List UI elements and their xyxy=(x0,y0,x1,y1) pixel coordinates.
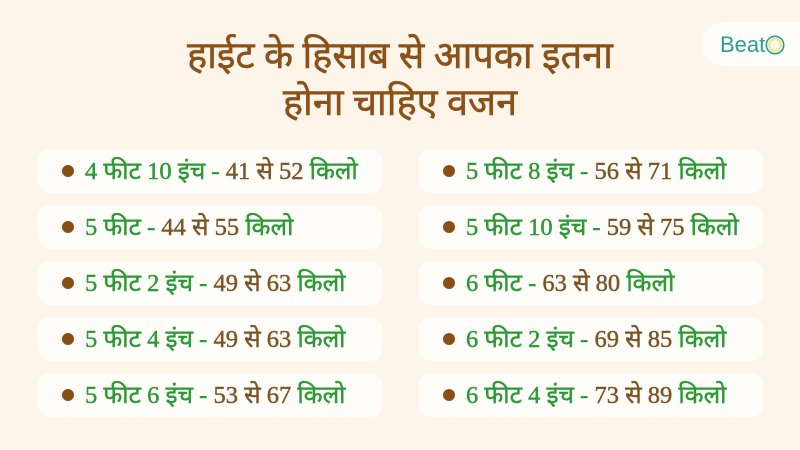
row: 5 feet 4 inches xyxy=(38,317,382,361)
logo: BeatO xyxy=(702,22,800,66)
row: 5 feet 6 inches: 5 फीट 6 इंच - 53 से 67 किलो xyxy=(85,382,346,409)
row: 5 feet 8 inches: 5 फीट 8 इंच - 56 से 71 किलो xyxy=(466,158,727,185)
row: 5 feet 4 inches: 5 फीट 4 इंच - 49 से 63 किलो xyxy=(85,326,346,353)
row: 5 feet 2 inches: 5 फीट 2 इंच - 49 से 63 किलो xyxy=(85,270,346,297)
row: 6 feet xyxy=(419,261,763,305)
title line 2: होना चाहिए वजन xyxy=(283,82,517,124)
row: 5 feet 8 inches xyxy=(419,149,763,193)
row: 6 feet 4 inches xyxy=(419,373,763,417)
row: 4 feet 10 inches: 4 फीट 10 इंच - 41 से 52 किलो xyxy=(85,158,358,185)
row: 6 feet 2 inches xyxy=(419,317,763,361)
row: 6 feet: 6 फीट - 63 से 80 किलो xyxy=(466,270,674,297)
row: 5 feet 10 inches: 5 फीट 10 इंच - 59 से 75 किलो xyxy=(466,214,739,241)
logo: BeatO: Beat xyxy=(720,32,765,57)
row: 5 feet 2 inches xyxy=(38,261,382,305)
row: 6 feet 4 inches: 6 फीट 4 इंच - 73 से 89 किलो xyxy=(466,382,727,409)
row: 5 feet 10 inches xyxy=(419,205,763,249)
row: 6 feet 2 inches: 6 फीट 2 इंच - 69 से 85 किलो xyxy=(466,326,727,353)
row: 5 feet 6 inches xyxy=(38,373,382,417)
row: 5 feet xyxy=(38,205,382,249)
title line 1: हाईट के हिसाब से आपका इतना xyxy=(187,35,613,77)
row: 5 feet: 5 फीट - 44 से 55 किलो xyxy=(85,214,293,241)
row: 4 feet 10 inches xyxy=(38,149,382,193)
